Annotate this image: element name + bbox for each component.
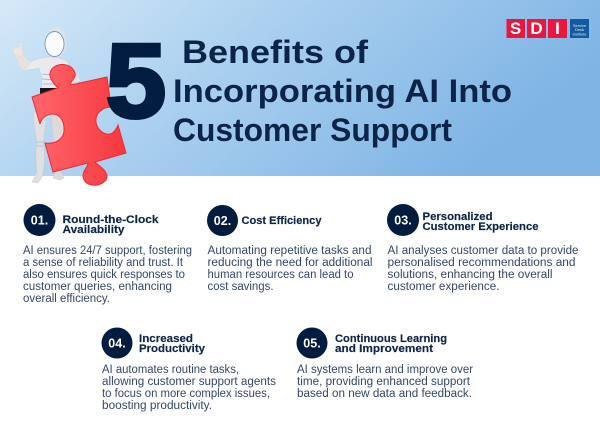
panel: benefit 02: Automating repetitive tasks and <box>208 245 372 257</box>
panel: benefit 05: based on new data and feedback. <box>297 388 472 400</box>
panel: benefit 01: Round-the-Clock <box>62 214 159 226</box>
panel: benefit 04: Increased <box>139 333 193 345</box>
panel: benefit 05: AI systems learn and improve over <box>297 364 473 376</box>
panel: benefit 04: Productivity <box>139 343 206 355</box>
panel: benefit 02: 02. <box>214 214 231 228</box>
panel: benefit 03: Customer Experience <box>422 221 538 233</box>
title: Benefits of <box>182 34 368 70</box>
panel: benefit 03: personalised recommendations and <box>388 257 576 269</box>
panel: benefit 05 <box>296 328 473 400</box>
panel: benefit 04: 04. <box>108 336 126 350</box>
logo: SDI: S <box>510 19 521 38</box>
panel: benefit 01: also ensures quick responses to <box>23 269 185 281</box>
title <box>173 34 512 148</box>
title: Customer Support <box>173 112 452 148</box>
panel: benefit 01 <box>23 204 192 305</box>
icon: red puzzle piece <box>32 64 126 185</box>
panel: benefit 02 <box>207 205 372 293</box>
panel: benefit 03: solutions, enhancing the overall <box>388 269 552 281</box>
panel: benefit 04: boosting productivity. <box>102 400 212 412</box>
panel: benefit 03: customer experience. <box>388 281 500 293</box>
logo: SDI: I <box>555 19 560 38</box>
panel: benefit 05: 05. <box>303 336 321 350</box>
header background <box>0 0 600 176</box>
logo: SDI: Institute <box>572 32 587 36</box>
logo: SDI <box>506 19 589 38</box>
title: Incorporating AI Into <box>173 73 512 109</box>
panel: benefit 03: 03. <box>394 214 412 228</box>
panel: benefit 04: to focus on more complex issues, <box>102 388 270 400</box>
panel: benefit 05: time, providing enhanced support <box>297 376 471 388</box>
big number 5: 5 <box>106 23 166 140</box>
logo: SDI: Desk <box>575 27 584 32</box>
panel: benefit 04 <box>102 328 276 412</box>
logo: SDI: Service <box>573 23 587 28</box>
panel: benefit 03: AI analyses customer data to provide <box>388 245 578 257</box>
panel: benefit 02: Cost Efficiency <box>242 215 322 227</box>
panel: benefit 01: Availability <box>62 224 125 236</box>
panel: benefit 04: allowing customer support agents <box>102 376 276 388</box>
panel: benefit 01: 01. <box>31 214 48 228</box>
panel: benefit 02: reducing the need for additional <box>208 257 372 269</box>
panel: benefit 01: overall efficiency. <box>23 293 110 305</box>
mannequin <box>13 27 80 183</box>
panel: benefit 05: and Improvement <box>335 343 433 355</box>
figure: mannequin holding puzzle piece <box>13 27 126 185</box>
panel: benefit 01: AI ensures 24/7 support, fostering <box>23 245 192 257</box>
panel: benefit 04: AI automates routine tasks, <box>102 364 239 376</box>
logo: SDI: D <box>530 19 543 38</box>
panel: benefit 05: Continuous Learning <box>335 333 447 345</box>
panel: benefit 03: Personalized <box>422 211 492 223</box>
panel: benefit 03 <box>387 204 578 293</box>
panel: benefit 02: human resources can lead to <box>208 269 354 281</box>
panel: benefit 02: cost savings. <box>208 281 274 293</box>
panel: benefit 01: customer queries, enhancing <box>23 281 172 293</box>
panel: benefit 01: a sense of reliability and trust. It <box>23 257 184 269</box>
